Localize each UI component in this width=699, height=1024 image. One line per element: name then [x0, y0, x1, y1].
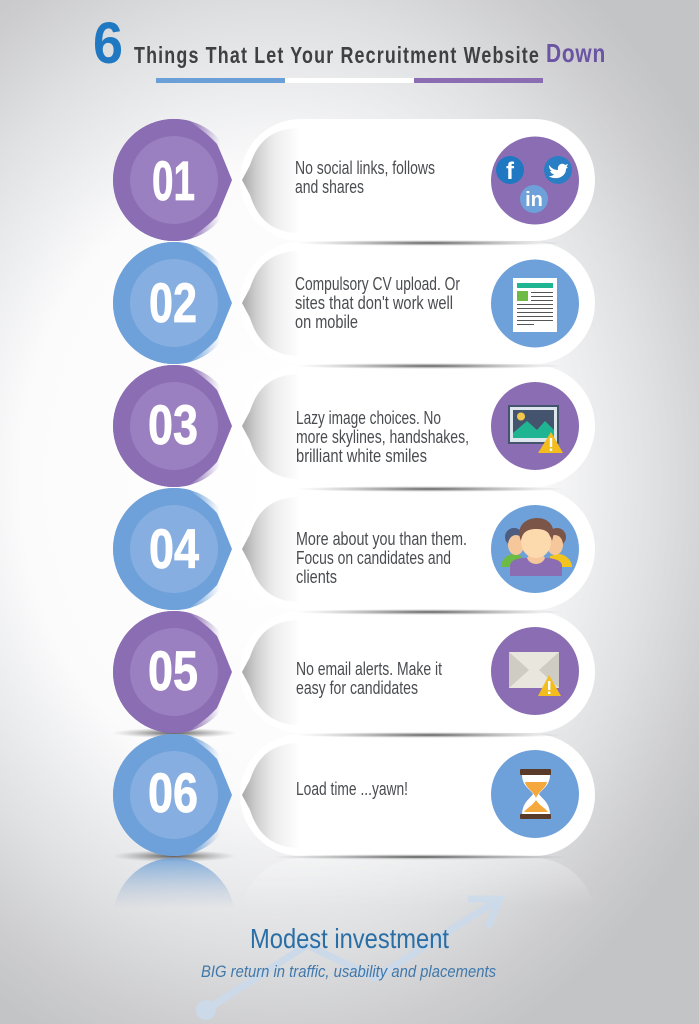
- panel: item 06: [112, 734, 595, 862]
- icon: document: [491, 260, 579, 348]
- closing subtext: BIG return in traffic, usability and placements: [201, 962, 496, 981]
- title: 6: [93, 11, 123, 76]
- text: more skylines, handshakes,: [296, 427, 469, 447]
- icon: mail warning: [491, 627, 579, 715]
- text: and shares: [295, 177, 364, 197]
- title: Down: [546, 38, 606, 68]
- text: Lazy image choices. No: [296, 408, 441, 428]
- number badge 06: 06: [148, 761, 198, 824]
- title: Things That Let Your Recruitment Website: [134, 42, 540, 68]
- text: Focus on candidates and: [296, 548, 451, 568]
- panel shadows: [270, 240, 570, 860]
- text: Load time ...yawn!: [296, 779, 408, 799]
- icon: social networks: f: [506, 158, 515, 185]
- number badge 03: 03: [148, 393, 198, 456]
- icon: hourglass: [491, 750, 579, 838]
- panel: item 01: [113, 119, 595, 241]
- text: sites that don't work well: [295, 293, 453, 313]
- text: No email alerts. Make it: [296, 659, 442, 679]
- text: on mobile: [295, 312, 358, 332]
- number badge 01: 01: [152, 149, 195, 212]
- number badge 06: [113, 734, 235, 856]
- closing heading: Modest investment: [250, 923, 449, 954]
- text: [296, 529, 467, 587]
- icon: people: [491, 505, 579, 593]
- text: clients: [296, 567, 337, 587]
- text: [296, 659, 442, 698]
- panel: item 03: [113, 365, 595, 487]
- title underline: [156, 78, 543, 83]
- text: [295, 274, 460, 332]
- number badge 02: [113, 242, 235, 364]
- text: [295, 158, 435, 197]
- text: [296, 408, 469, 466]
- number badge 03: [113, 365, 235, 487]
- icon: social networks: [491, 136, 579, 224]
- panel: item 05: [112, 611, 595, 738]
- panel: item 04: [113, 488, 595, 610]
- icon: image warning: [491, 382, 579, 470]
- text: easy for candidates: [296, 678, 418, 698]
- panel: item 02: [113, 242, 595, 364]
- text: More about you than them.: [296, 529, 467, 549]
- number badge 05: 05: [148, 639, 198, 702]
- text: Compulsory CV upload. Or: [295, 274, 460, 294]
- number badge 05: [113, 611, 235, 733]
- number badge 02: 02: [149, 271, 197, 334]
- number badge 04: [113, 488, 235, 610]
- number badge 01: [113, 119, 235, 241]
- arrow: growth line: [196, 899, 500, 1020]
- text: brilliant white smiles: [296, 446, 427, 466]
- text: No social links, follows: [295, 158, 435, 178]
- title: [93, 11, 606, 76]
- icon: social networks: in: [525, 189, 543, 211]
- number badge 04: 04: [149, 517, 199, 580]
- reflection: [113, 858, 595, 980]
